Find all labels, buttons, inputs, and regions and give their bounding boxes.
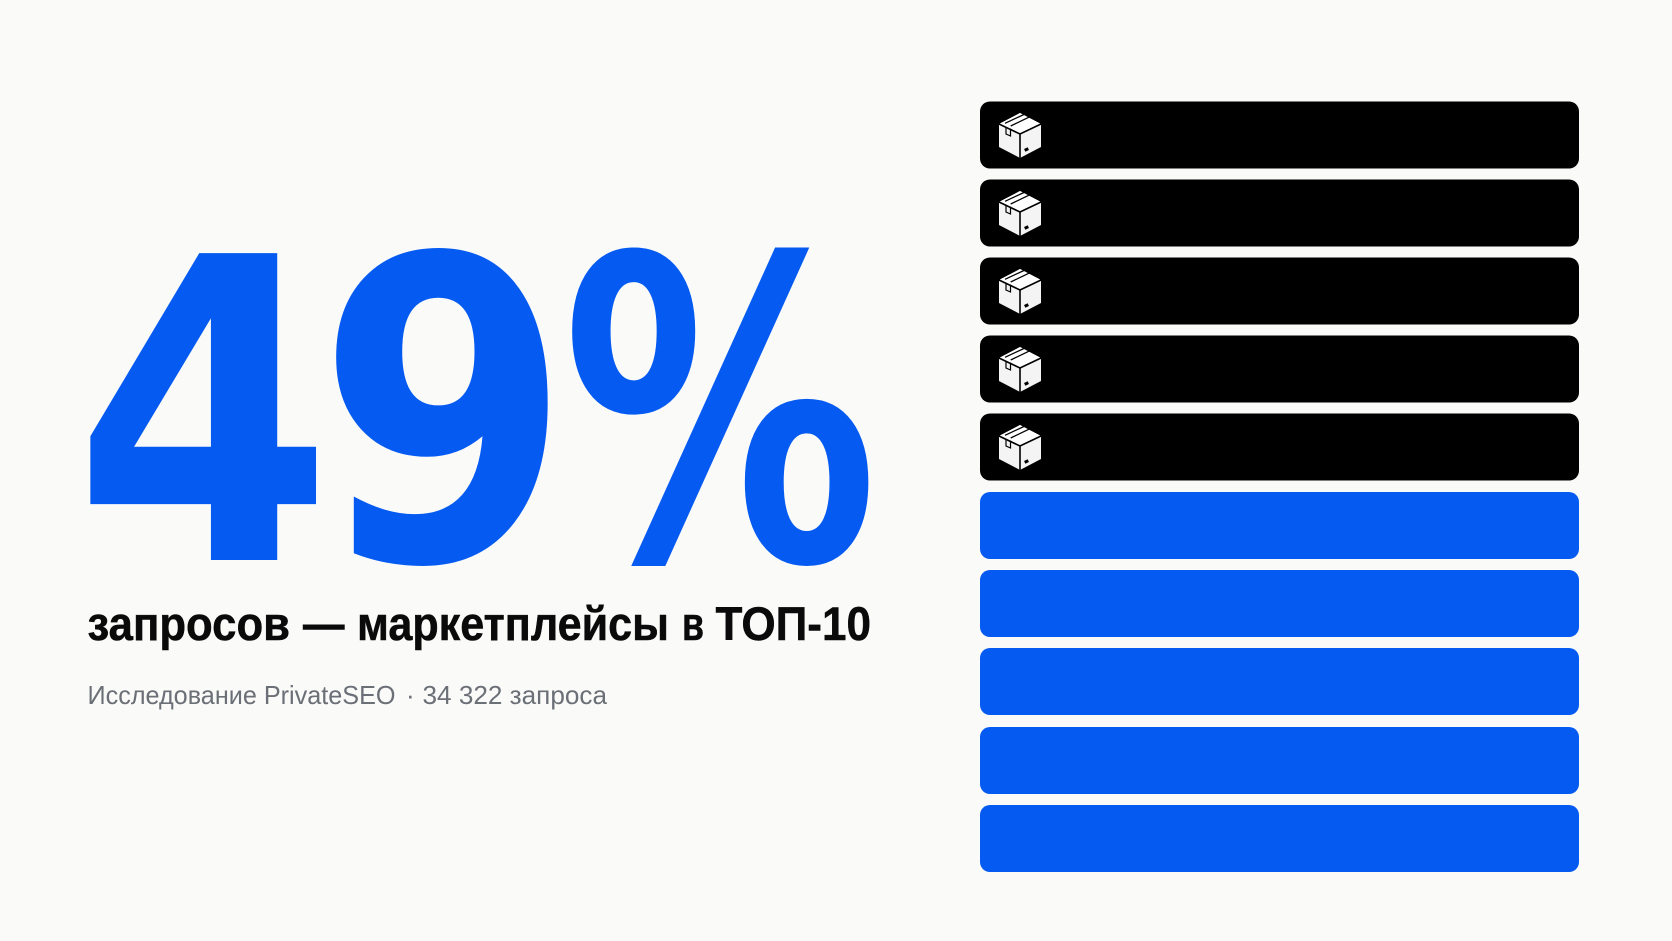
bar 8	[980, 648, 1579, 715]
subtitle: запросов — маркетплейсы в ТОП-10: —	[303, 597, 344, 650]
big number: 49%: %	[562, 170, 878, 660]
subtitle: запросов — маркетплейсы в ТОП-10: маркетплейсы	[357, 597, 669, 650]
bar 4: marketplace	[980, 336, 1579, 402]
bar 5: marketplace	[980, 414, 1579, 480]
source line	[88, 680, 608, 710]
chart: ten bars, five black marketplaces and five blue	[980, 102, 1579, 872]
big number: 49%	[74, 169, 878, 660]
bar 2: marketplace	[980, 180, 1579, 246]
subtitle: запросов — маркетплейсы в ТОП-10: в	[682, 597, 704, 650]
source line: Исследование PrivateSEO	[88, 680, 396, 710]
bar 3: marketplace	[980, 258, 1579, 324]
bar 9	[980, 727, 1579, 794]
source line: ·	[406, 680, 415, 710]
bar 6	[980, 492, 1579, 559]
bar 1: marketplace	[980, 102, 1579, 168]
big number: 49%: 9	[317, 169, 571, 659]
bar 10	[980, 805, 1579, 872]
subtitle: запросов — маркетплейсы в ТОП-10	[88, 597, 871, 650]
big number: 49%: 4	[74, 169, 333, 660]
source line: 34 322 запроса	[422, 680, 608, 710]
subtitle: запросов — маркетплейсы в ТОП-10: запросов	[88, 597, 290, 650]
subtitle: запросов — маркетплейсы в ТОП-10: ТОП-10	[716, 597, 871, 650]
bar 7	[980, 570, 1579, 637]
